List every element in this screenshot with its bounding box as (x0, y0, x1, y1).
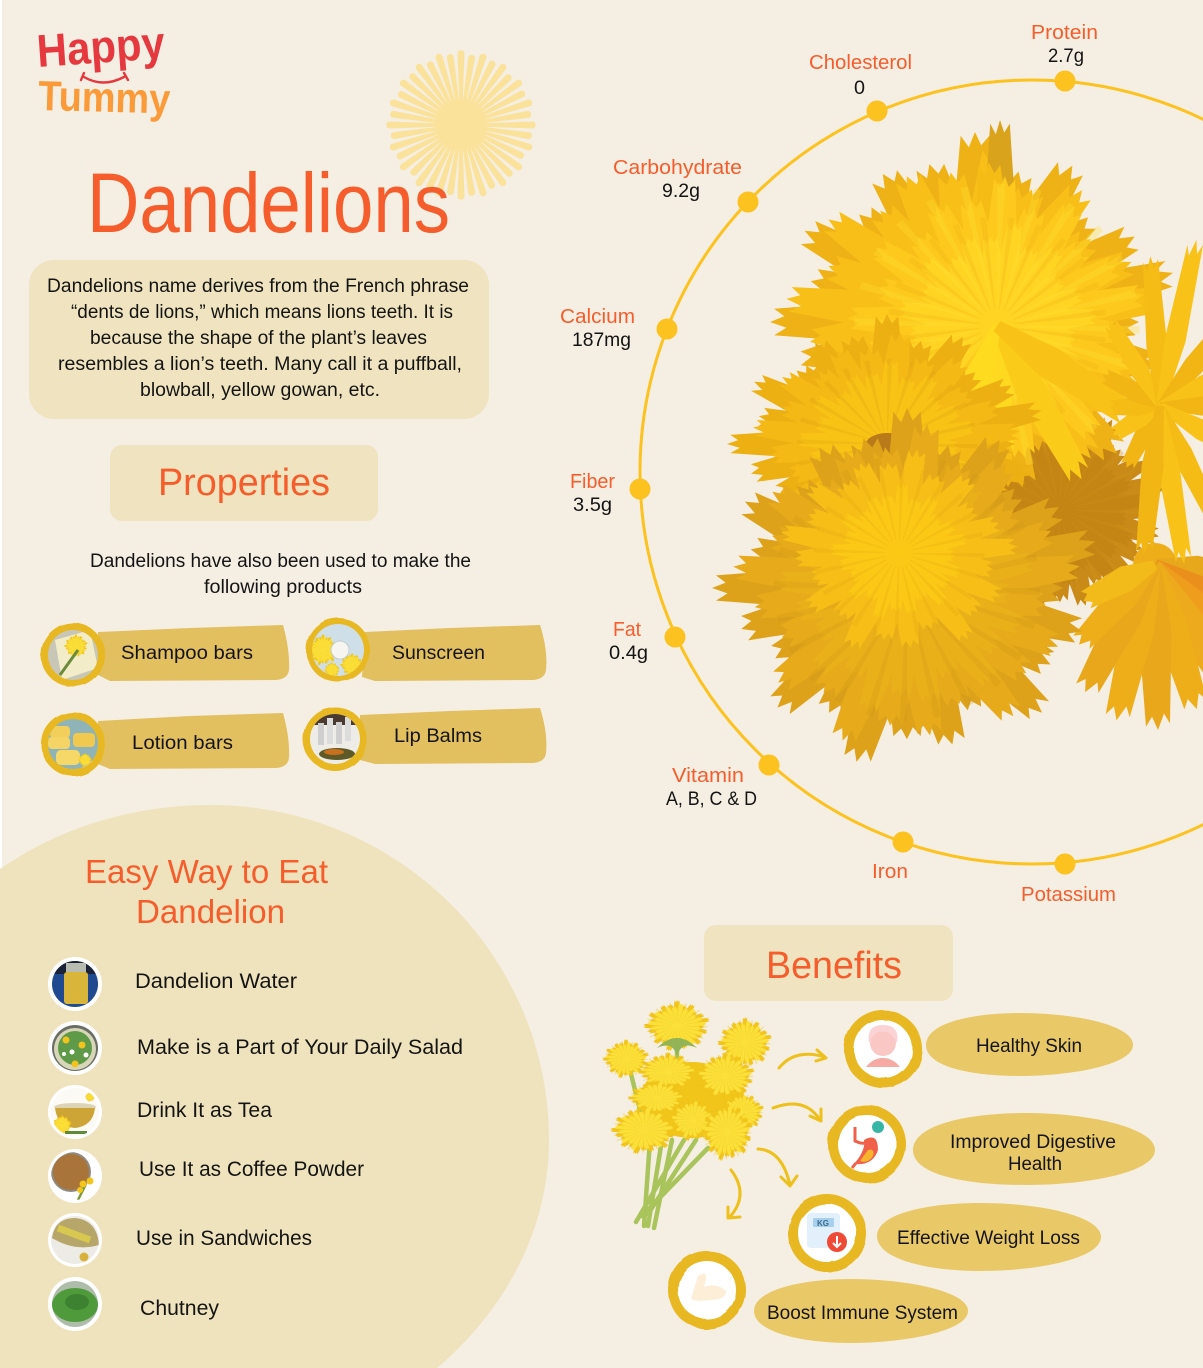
product: Shampoo bars (45, 625, 289, 683)
icon: face (866, 1025, 900, 1067)
product: Shampoo bars: Shampoo bars (121, 643, 253, 664)
flower: right upper (1099, 238, 1203, 566)
product: Lotion bars: Lotion bars (132, 733, 233, 754)
product: Sunscreen: Sunscreen (392, 643, 485, 664)
benefit: Improved Digestive Health (833, 1110, 1155, 1185)
title: Dandelions (87, 156, 450, 250)
item: Coffee powder (48, 1149, 364, 1203)
item: Salad: Make is a Part of Your Daily Salad (137, 1036, 463, 1059)
product: Lip Balms: Lip Balms (394, 726, 482, 747)
flower: right lower fan (1067, 543, 1203, 730)
logo: Happy Tummy (35, 16, 172, 122)
item: Sandwiches: Use in Sandwiches (136, 1227, 312, 1250)
panel: description: because the shape of the plant’s leaves (90, 328, 427, 349)
illustration: dandelion bouquet (602, 1000, 773, 1228)
label: Fat (609, 619, 648, 664)
icon: arm muscle (691, 1274, 726, 1301)
label: Protein: Protein (1031, 22, 1098, 44)
panel: description: Dandelions name derives from the French phrase (47, 276, 469, 297)
thumbnail: lotion bars (48, 719, 98, 769)
label: Carbohydrate: 9.2g (662, 181, 700, 202)
label: Fiber (570, 471, 615, 516)
label: Fat: Fat (613, 619, 641, 641)
icon: scale (807, 1213, 847, 1252)
text: products intro: following products (204, 577, 362, 598)
item: Tea: Drink It as Tea (137, 1099, 272, 1122)
panel: description: blowball, yellow gowan, etc. (140, 380, 380, 401)
flower: middle (727, 314, 1046, 573)
flower: top large (765, 120, 1183, 517)
heading: Benefits: Benefits (766, 945, 902, 987)
label: Fiber: Fiber (570, 471, 615, 493)
logo: Happy Tummy: Happy (35, 16, 167, 77)
arrows: bouquet to benefits (728, 1050, 826, 1218)
benefit: Healthy Skin (849, 1013, 1133, 1083)
panel: easy way to eat (0, 805, 549, 1368)
label: Cholesterol: 0 (854, 78, 865, 99)
benefit: Improved Digestive Health: Health (1008, 1154, 1062, 1175)
label: Iron: Iron (872, 861, 908, 883)
item: Dandelion Water: Dandelion Water (135, 970, 297, 993)
label: Cholesterol: Cholesterol (809, 52, 912, 74)
text: products intro: Dandelions have also been used to make the (90, 551, 471, 572)
item: Dandelion Water (48, 957, 297, 1011)
flower: brown rear (950, 400, 1169, 619)
panel: description (29, 260, 489, 419)
label: Vitamin (666, 765, 757, 810)
heading: Easy Way to Eat Dandelion: Easy Way to Eat (85, 853, 328, 890)
label: Potassium: Potassium (1021, 884, 1116, 906)
thumbnail: lip balms (310, 714, 360, 764)
heading: Easy Way to Eat Dandelion (85, 853, 328, 930)
flower: bottom large (712, 403, 1100, 772)
item: Chutney: Chutney (140, 1297, 220, 1320)
product: Lotion bars (45, 713, 289, 772)
item: Chutney (48, 1277, 220, 1332)
heading: Easy Way to Eat Dandelion: Dandelion (136, 893, 285, 930)
label: Fat: 0.4g (609, 643, 648, 664)
label: Carbohydrate: Carbohydrate (613, 157, 742, 179)
thumbnail: sunscreen (312, 624, 364, 676)
benefit: Healthy Skin: Healthy Skin (976, 1036, 1082, 1057)
panel: description: resembles a lion’s teeth. Many call it a puffball, (58, 354, 462, 375)
label: Cholesterol (809, 52, 912, 99)
item: Coffee powder: Use It as Coffee Powder (139, 1158, 364, 1181)
label: Calcium (560, 306, 635, 351)
label: Calcium: 187mg (572, 330, 631, 351)
benefit: Boost Immune System (673, 1256, 968, 1343)
item: Salad (48, 1021, 463, 1075)
illustration: dandelion flower heads (712, 120, 1203, 772)
item: Tea (48, 1085, 272, 1139)
benefit: Improved Digestive Health: Improved Digestive (950, 1132, 1116, 1153)
product: Sunscreen (307, 622, 546, 681)
item: Sandwiches (48, 1213, 312, 1267)
heading: Properties (110, 445, 378, 521)
label: Protein (1031, 22, 1098, 67)
chart: nutrition orbit (560, 22, 1203, 906)
benefit: Boost Immune System: Boost Immune System (767, 1303, 958, 1324)
icon: scale: KG (817, 1219, 829, 1228)
panel: description: “dents de lions,” which means lions teeth. It is (71, 302, 453, 323)
text: products intro (90, 551, 471, 598)
icon: stomach (852, 1121, 884, 1168)
logo: Happy Tummy: Tummy (38, 72, 172, 122)
benefit: Effective Weight Loss: Effective Weight Loss (897, 1228, 1080, 1249)
label: Calcium: Calcium (560, 306, 635, 328)
heading: Benefits (704, 925, 953, 1001)
benefit: Effective Weight Loss (793, 1199, 1101, 1271)
label: Carbohydrate (613, 157, 742, 202)
product: Lip Balms (307, 708, 546, 767)
decorative sunburst (386, 50, 536, 200)
thumbnail: shampoo bar (48, 630, 98, 680)
label: Protein: 2.7g (1048, 46, 1084, 67)
label: Fiber: 3.5g (573, 495, 612, 516)
heading: Properties: Properties (158, 462, 330, 504)
label: Vitamin: A, B, C & D (666, 789, 757, 810)
label: Vitamin: Vitamin (672, 765, 744, 787)
